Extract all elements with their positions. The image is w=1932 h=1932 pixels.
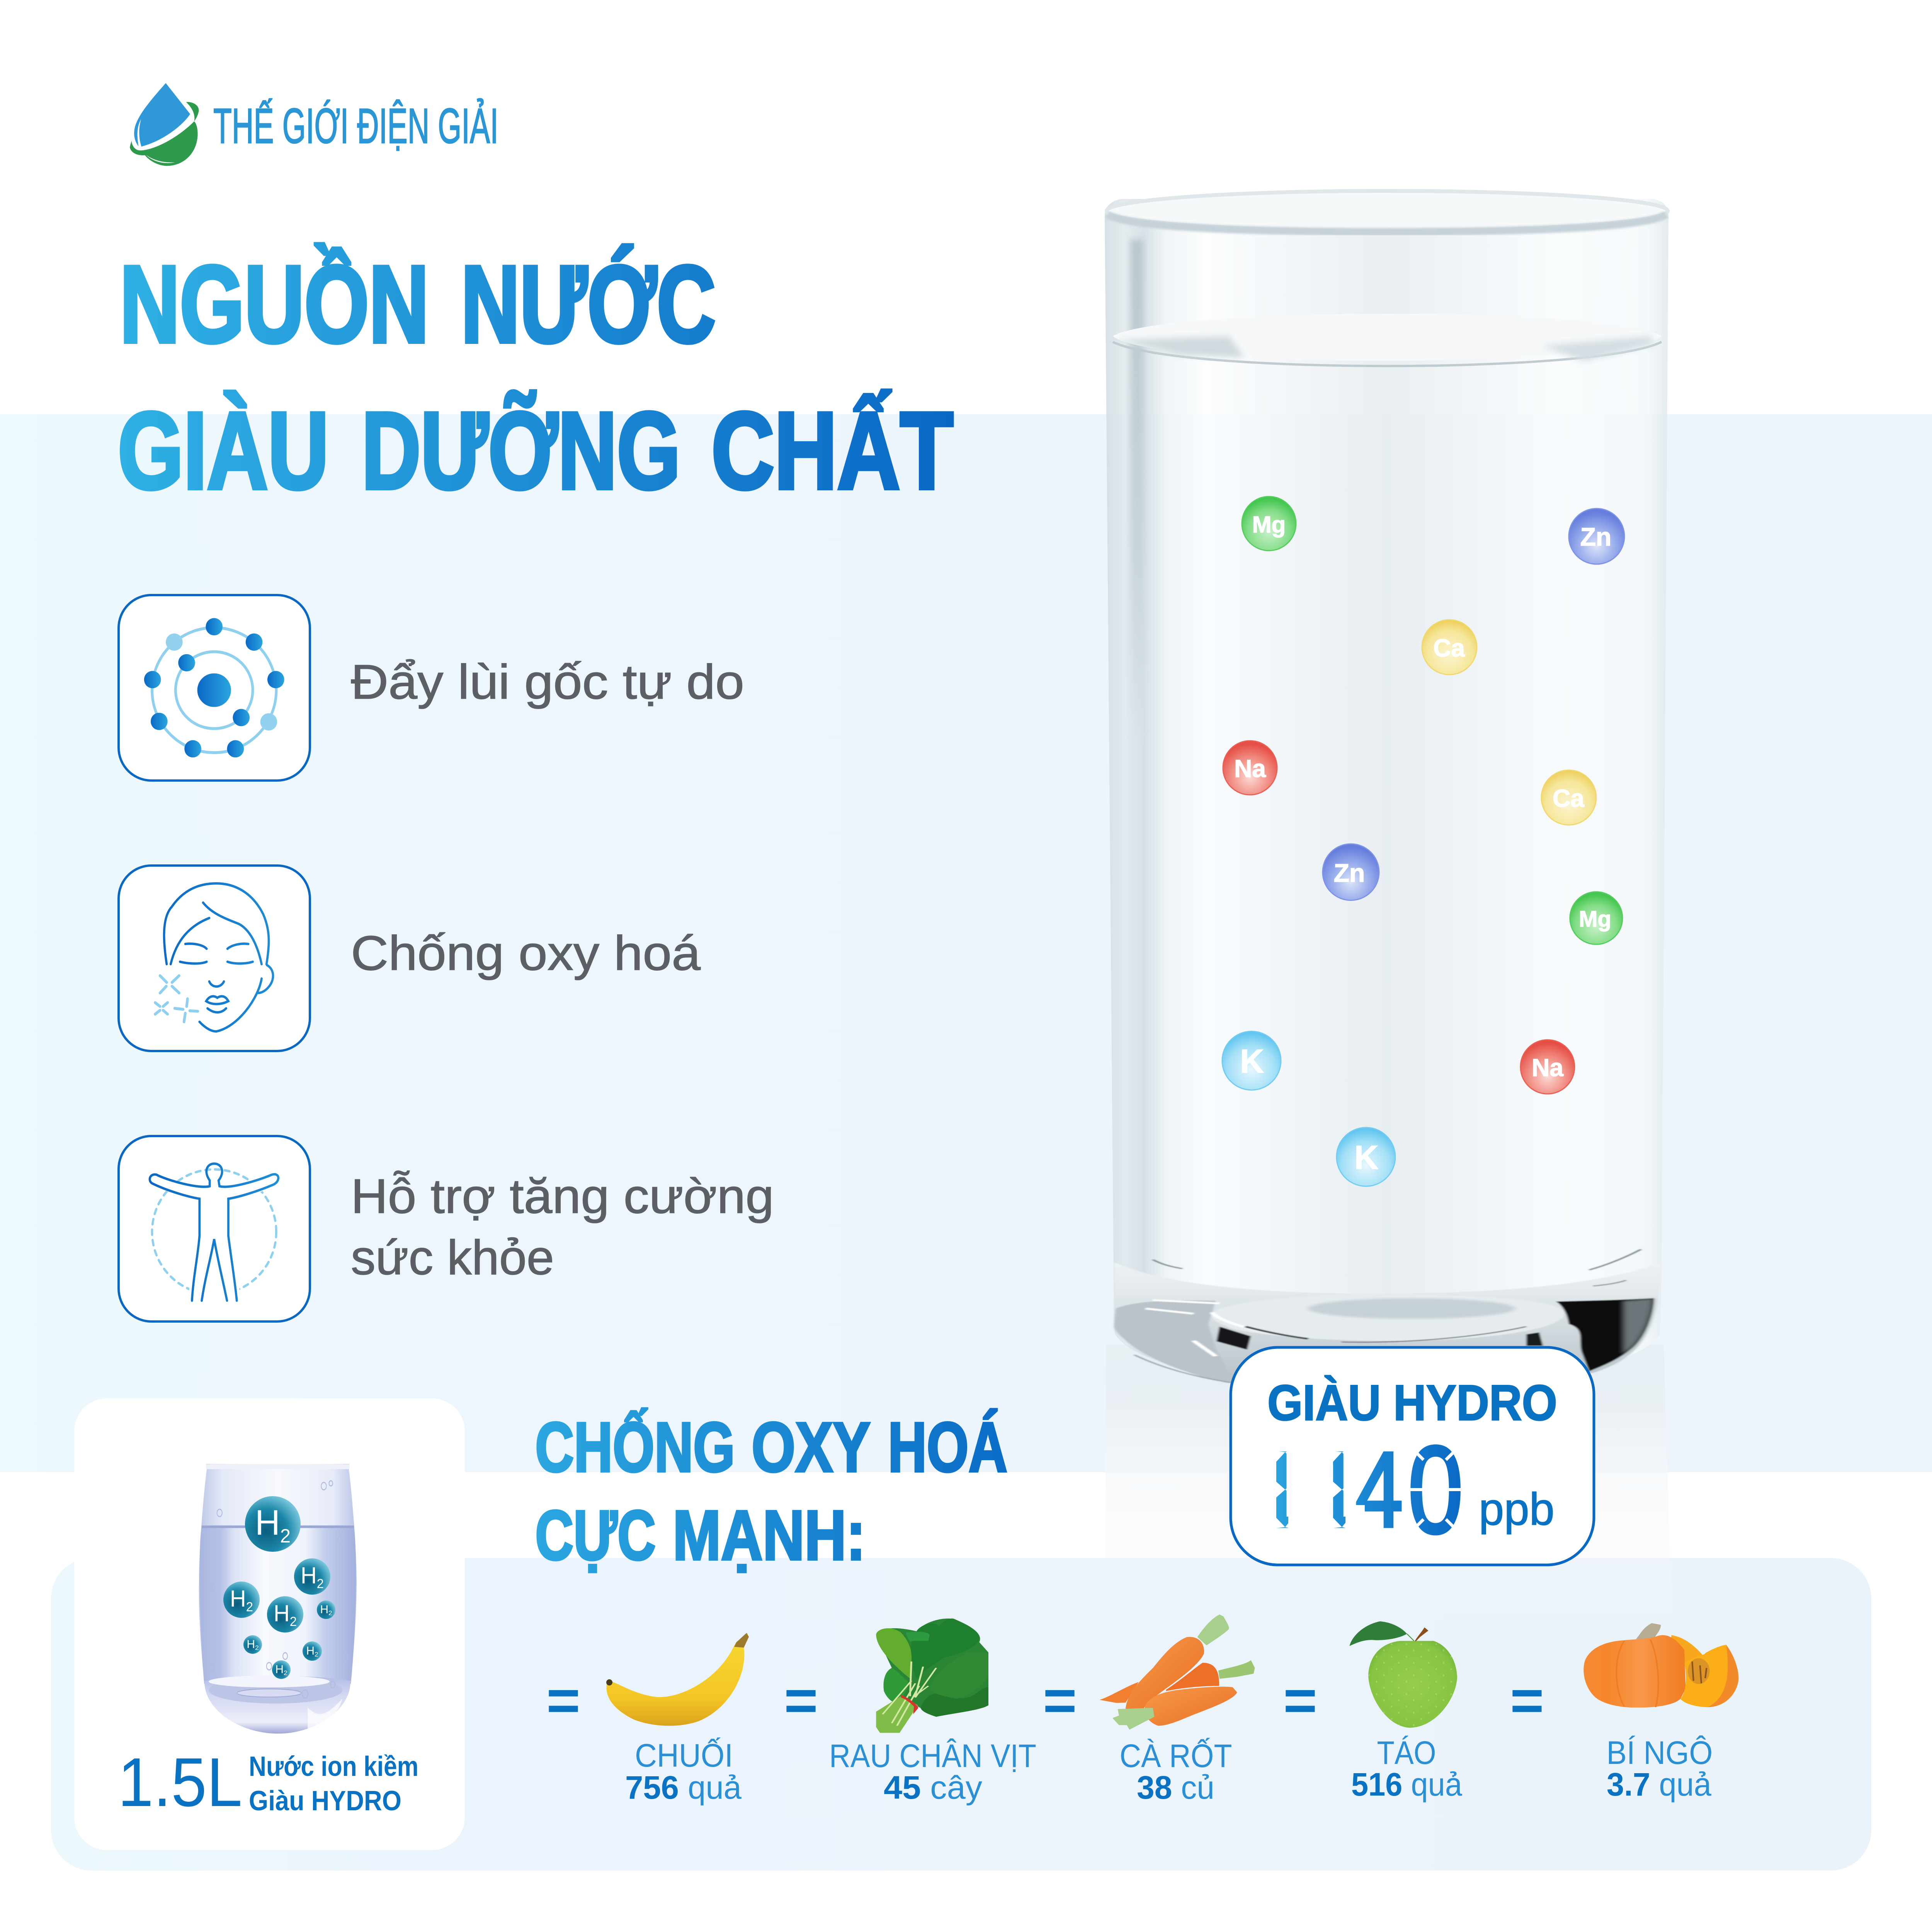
bubble: Zn: Zn [1334,859,1365,887]
bubble: Na [1520,1040,1575,1094]
hydrogen value: 1 [1313,1430,1361,1549]
glass rim [1107,191,1668,232]
callout heading: GIÀU HYDRO [1267,1374,1557,1431]
icon: pumpkin [1583,1623,1738,1708]
glass shell [199,1464,357,1734]
water type label: Nước ion kiềm [249,1751,418,1782]
icon: carrots [1099,1614,1255,1730]
subheading: antioxidant: CHỐNG [535,1408,735,1486]
icon card: free radicals [119,595,310,781]
bubble: Ca: Ca [1433,634,1465,662]
title [118,243,953,512]
text: benefit 3 [351,1169,774,1285]
water type label [249,1751,418,1816]
icon: apple [1349,1621,1457,1728]
icon: atom [144,618,284,757]
H2 bubbles: 2 [284,1669,287,1677]
panel: bottom comparison panel [51,1558,1871,1871]
food label: pumpkin: 3.7 quả [1607,1766,1711,1803]
subheading: antioxidant [535,1408,1007,1575]
food label: banana [625,1737,742,1806]
food label: carrot [1120,1738,1232,1806]
water surface [1113,314,1662,366]
bubble: Na: Na [1234,755,1266,782]
hydrogen value: 1 [1256,1430,1304,1549]
icon: glass with H2 bubbles [199,1464,357,1734]
food label: banana: 756 quả [625,1769,742,1806]
food label: pumpkin: BÍ NGÔ [1607,1735,1713,1771]
equals signs [546,1668,1544,1733]
title line 2: CHẤT [711,389,953,512]
text: benefit 3: Hỗ trợ tăng cường [351,1169,774,1223]
icon: banana [606,1633,749,1726]
hydrogen value: 0 [1408,1421,1463,1559]
bubble: Ca: Ca [1553,784,1584,812]
title line 1: NGUỒN [120,243,429,365]
food label: apple: 516 quả [1351,1766,1462,1803]
bubble: Na: Na [1532,1054,1563,1082]
logo: Thế Giới Điện Giải [130,83,498,166]
H2 bubbles: 2 [317,1577,324,1591]
H2 bubbles: 2 [290,1614,297,1629]
H2 bubbles: H [306,1645,315,1657]
food label: spinach: 45 cây [884,1769,982,1806]
food label: apple: TÁO [1377,1735,1436,1771]
food label: carrot: CÀ RỐT [1120,1738,1232,1774]
bubble: K: K [1240,1043,1264,1080]
bubble: Zn [1569,509,1624,564]
H2 bubbles [223,1496,335,1679]
bubble: Mg [1570,892,1622,944]
H2 bubbles: 2 [255,1644,259,1651]
text: benefit 1: Đẩy lùi gốc tự do [351,655,744,709]
icon: face [155,883,273,1031]
bubble: K [1337,1128,1395,1186]
food label: spinach: RAU CHÂN VỊT [829,1738,1036,1774]
H2 bubbles: 2 [315,1651,318,1658]
bubble: Ca [1541,770,1596,825]
water type label: Giàu HYDRO [249,1786,401,1816]
H2 bubbles: H [274,1600,290,1626]
bubble: K [1222,1031,1281,1090]
bubble: Zn: Zn [1580,522,1611,551]
glass body [1105,199,1668,1395]
subheading: antioxidant: MẠNH: [673,1496,866,1575]
subheading: antioxidant: HOÁ [888,1408,1007,1486]
background band [0,414,1932,1472]
logo wordmark: THẾ GIỚI ĐIỆN GIẢI [213,99,498,154]
bubble: K: K [1354,1139,1378,1176]
unit: ppb [1479,1484,1554,1535]
mineral bubbles [1222,497,1624,1186]
H2 bubbles: H [275,1663,284,1676]
title line 2: GIÀU [118,389,329,512]
bubble: Mg: Mg [1579,906,1611,932]
volume label: 1.5L [118,1743,242,1821]
H2 bubbles: H [320,1603,328,1616]
icon card: antioxidant [119,866,310,1051]
equals signs: = [1510,1668,1544,1733]
equals signs: = [1283,1668,1317,1733]
H2 bubbles: H [230,1586,247,1612]
food label: banana: CHUỐI [635,1737,733,1774]
subheading: antioxidant: OXY [752,1408,870,1486]
H2 bubbles: 2 [328,1609,332,1617]
bubble: Mg: Mg [1252,512,1286,537]
H2 bubbles: H [255,1503,281,1543]
food label: spinach [829,1738,1036,1806]
callout: Giàu Hydro 1140 ppb [1231,1347,1594,1565]
hydrogen value: 4 [1355,1430,1403,1549]
left wall highlight [1130,240,1143,742]
icon: spinach [876,1619,988,1733]
icon card: health [119,1136,310,1321]
icon: water drop and orbit [130,83,199,166]
H2 bubbles: 2 [246,1600,253,1614]
food label: carrot: 38 củ [1137,1769,1214,1806]
glass reflection [1105,1345,1672,1623]
H2 bubbles: 2 [280,1525,291,1547]
food label: pumpkin [1607,1735,1713,1803]
glass base [1114,1249,1661,1383]
food label: apple [1351,1735,1462,1803]
card: 1.5L water [74,1398,465,1850]
equals signs: = [1043,1668,1077,1733]
H2 bubbles: H [247,1638,255,1651]
icon: body in circle [150,1163,278,1301]
bubble: Mg [1242,497,1296,551]
title line 1: NƯỚC [461,243,716,365]
text: benefit 2: Chống oxy hoá [351,926,701,980]
text: benefit 3: sức khỏe [351,1230,554,1285]
bubble: Na [1223,741,1277,795]
equals signs: = [546,1668,580,1733]
large glass of water [1105,191,1672,1623]
bubble: Zn [1323,844,1379,900]
H2 bubbles: H [301,1563,317,1588]
equals signs: = [784,1668,818,1733]
subheading: antioxidant: CỰC [535,1496,656,1575]
title line 2: DƯỠNG [362,389,680,512]
bubble: Ca [1422,620,1477,675]
